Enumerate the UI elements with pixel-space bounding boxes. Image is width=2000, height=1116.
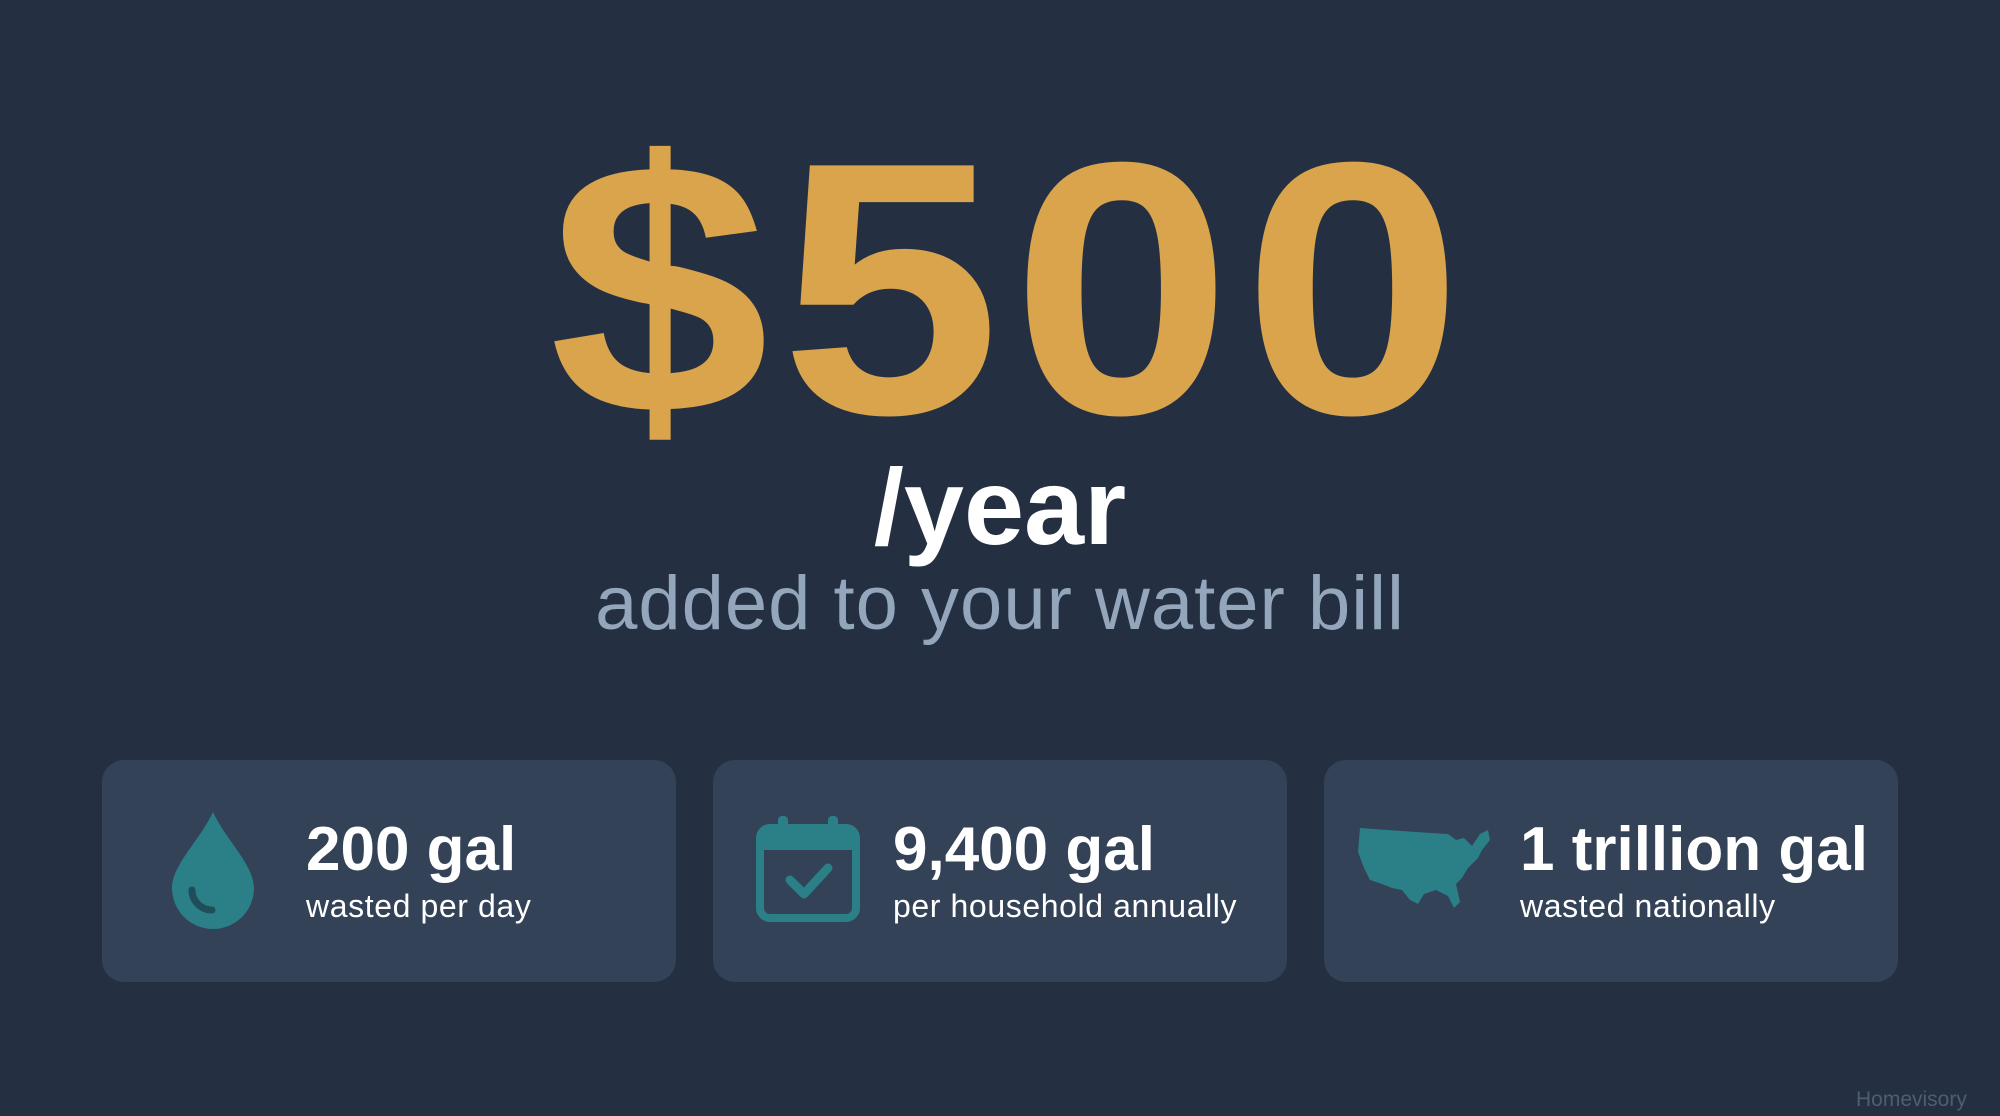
card: 1 trillion gal: wasted nationally — [1520, 888, 1776, 924]
brand label: Homevisory — [1856, 1088, 1967, 1111]
headline amount: $500 — [549, 88, 1474, 490]
stat text: 200 gal — [306, 815, 516, 884]
per year label: /year — [874, 446, 1126, 567]
stat text: 1 trillion gal — [1520, 815, 1868, 884]
icon: water drop — [172, 812, 254, 929]
card: 200 gal: wasted per day — [306, 888, 531, 924]
subtitle: added to your water bill — [595, 561, 1405, 646]
icon: calendar — [756, 816, 860, 922]
stat text: 9,400 gal — [893, 815, 1155, 884]
card: 200 gal — [102, 760, 676, 982]
icon: US map — [1358, 828, 1490, 908]
card: 9,400 gal: per household annually — [893, 888, 1237, 924]
card: 1 trillion gal — [1324, 760, 1898, 982]
card: 9,400 gal — [713, 760, 1287, 982]
